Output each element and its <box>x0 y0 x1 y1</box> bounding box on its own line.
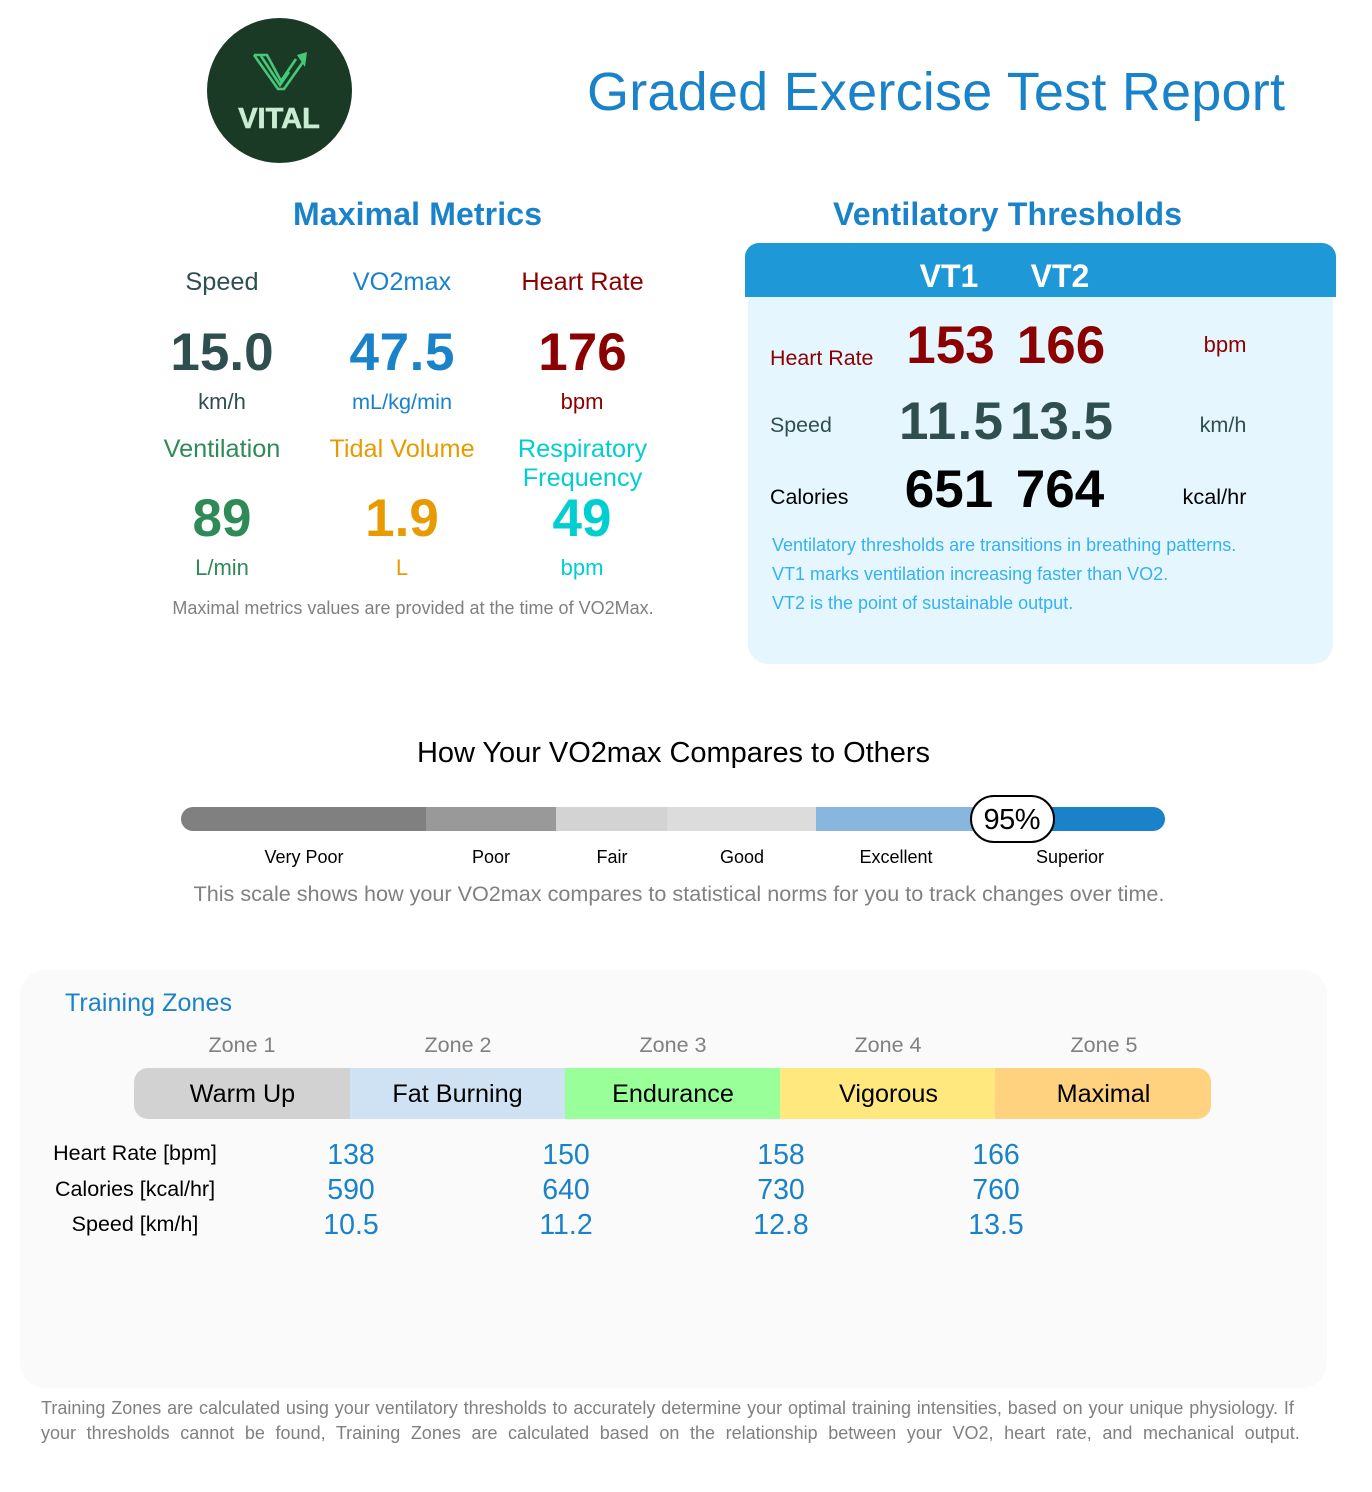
zone values: 590 <box>327 1174 375 1206</box>
metric: speed <box>170 268 274 414</box>
zone numbers: Zone 5 <box>1071 1033 1138 1057</box>
zone values: 10.5 <box>323 1209 379 1241</box>
panel: training zones <box>20 970 1327 1388</box>
row labels: Heart Rate [bpm] <box>53 1141 217 1165</box>
metric: ventilation: L/min <box>195 555 249 580</box>
percentile marker <box>971 796 1054 842</box>
metric: VO2max <box>350 268 454 414</box>
metric: respiratory frequency <box>518 435 648 580</box>
metric: speed: Speed <box>185 268 259 296</box>
heading: Ventilatory Thresholds: Ventilatory Thresholds <box>833 196 1182 232</box>
logo: Vital <box>207 18 352 163</box>
row: calories <box>770 460 1246 519</box>
zone values: 11.2 <box>539 1209 593 1241</box>
zone bar: Maximal <box>1057 1080 1150 1108</box>
zone values: 138 <box>327 1139 375 1171</box>
metric: heart rate: 176 <box>538 323 627 382</box>
scale labels: Excellent <box>859 847 933 867</box>
metric: VO2max: mL/kg/min <box>352 389 452 414</box>
zone values: 150 <box>542 1139 590 1171</box>
zone values: 13.5 <box>968 1209 1024 1241</box>
metric: respiratory frequency: Frequency <box>523 464 643 492</box>
row: heart rate: 166 <box>1017 316 1105 375</box>
zone values: 640 <box>542 1174 590 1206</box>
heading: training zones: Training Zones <box>65 989 232 1017</box>
row: speed: 13.5 <box>1010 392 1113 451</box>
metric: respiratory frequency: 49 <box>553 489 611 548</box>
metric: heart rate: Heart Rate <box>521 268 644 296</box>
panel: ventilatory thresholds <box>745 243 1336 664</box>
zone values: 730 <box>757 1174 805 1206</box>
row: heart rate <box>770 316 1246 375</box>
zone bar <box>134 1068 1211 1119</box>
scale labels <box>264 847 1104 867</box>
row: calories: 651 <box>905 460 993 519</box>
zone numbers <box>209 1033 1138 1057</box>
row: calories: Calories <box>770 485 848 509</box>
metric: tidal volume <box>329 435 475 580</box>
table header: VT2 <box>1031 258 1089 294</box>
logo: Vital: VITAL <box>238 103 320 135</box>
metric: respiratory frequency: Respiratory <box>518 435 648 463</box>
row labels <box>53 1141 217 1236</box>
metric: VO2max: 47.5 <box>350 323 454 382</box>
note: ventilatory thresholds <box>772 535 1236 613</box>
zone values: 760 <box>972 1174 1020 1206</box>
row labels: Speed [km/h] <box>72 1212 198 1236</box>
note: training zones: your thresholds cannot be found, Training Zones are calculated based on the relationship between your VO2, heart rate, and mechanical output. <box>41 1423 1300 1443</box>
row: heart rate: 153 <box>906 316 995 375</box>
row: speed: Speed <box>770 413 832 437</box>
percentile marker: 95% <box>984 804 1040 836</box>
note: training zones: Training Zones are calculated using your ventilatory thresholds to accurately determine your optimal training intensities, based on your unique physiology. If <box>41 1398 1295 1418</box>
zone values: 166 <box>972 1139 1020 1171</box>
row: calories: 764 <box>1016 460 1105 519</box>
table header <box>745 243 1336 297</box>
zone numbers: Zone 1 <box>209 1033 275 1057</box>
metric: ventilation: Ventilation <box>164 435 280 463</box>
row: speed <box>770 392 1246 451</box>
percentile scale <box>181 796 1165 867</box>
metric: speed: 15.0 <box>170 323 274 382</box>
panel: maximal metrics <box>164 268 654 618</box>
zone bar: Endurance <box>612 1080 734 1108</box>
zone numbers: Zone 3 <box>640 1033 707 1057</box>
scale labels: Superior <box>1036 847 1104 867</box>
note: training zones <box>41 1398 1300 1443</box>
row labels: Calories [kcal/hr] <box>55 1177 215 1201</box>
zone bar: Warm Up <box>190 1080 295 1108</box>
scale labels: Poor <box>472 847 510 867</box>
table header: VT1 <box>920 258 978 294</box>
note: scale: This scale shows how your VO2max compares to statistical norms for you to track changes over time. <box>194 881 1164 906</box>
metric: tidal volume: Tidal Volume <box>329 435 475 463</box>
row: speed: 11.5 <box>899 392 1003 451</box>
metric: ventilation <box>164 435 280 580</box>
zone bar: Fat Burning <box>392 1080 523 1108</box>
scale labels: Very Poor <box>264 847 344 867</box>
row: heart rate: bpm <box>1204 332 1246 357</box>
metric: heart rate: bpm <box>561 389 603 414</box>
row: heart rate: Heart Rate <box>770 346 873 370</box>
row: speed: km/h <box>1200 412 1246 437</box>
metric: respiratory frequency: bpm <box>561 555 603 580</box>
metric: tidal volume: L <box>396 555 408 580</box>
metric: heart rate <box>521 268 644 414</box>
zone numbers: Zone 4 <box>855 1033 922 1057</box>
zone values: 12.8 <box>753 1209 809 1241</box>
title: Graded Exercise Test Report <box>587 62 1285 122</box>
zone values <box>323 1139 1024 1241</box>
metric: speed: km/h <box>198 389 246 414</box>
zone bar: Vigorous <box>839 1080 938 1108</box>
note: ventilatory thresholds: VT2 is the point of sustainable output. <box>772 593 1073 613</box>
heading: Maximal Metrics: Maximal Metrics <box>293 196 542 232</box>
scale labels: Good <box>720 847 764 867</box>
zone numbers: Zone 2 <box>425 1033 491 1057</box>
note: ventilatory thresholds: Ventilatory thresholds are transitions in breathing patterns. <box>772 535 1236 555</box>
zone values: 158 <box>757 1139 805 1171</box>
metric: tidal volume: 1.9 <box>365 489 439 548</box>
row: calories: kcal/hr <box>1183 484 1246 509</box>
note: maximal metrics: Maximal metrics values are provided at the time of VO2Max. <box>172 598 654 618</box>
heading: VO2max comparison: How Your VO2max Compares to Others <box>417 737 930 769</box>
scale labels: Fair <box>596 847 628 867</box>
note: ventilatory thresholds: VT1 marks ventilation increasing faster than VO2. <box>772 564 1168 584</box>
metric: ventilation: 89 <box>193 489 251 548</box>
metric: VO2max: VO2max <box>353 268 452 296</box>
